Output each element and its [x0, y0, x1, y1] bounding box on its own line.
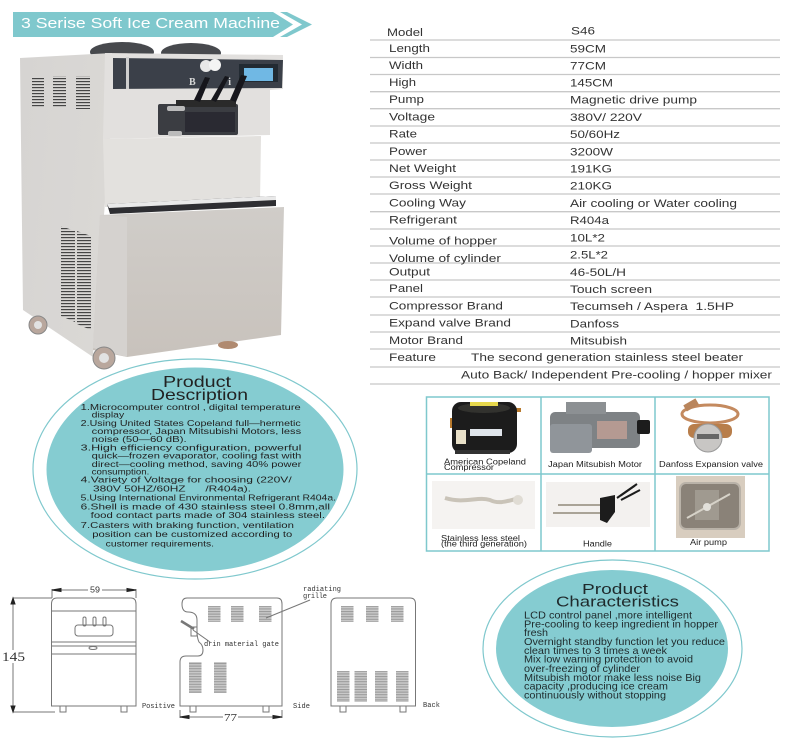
characteristics list: LCD control panel ,more intelligent: [524, 609, 692, 621]
technical drawing: side view: [180, 598, 310, 724]
description list: display: [92, 410, 125, 420]
specification table: 50/60Hz: [570, 129, 620, 141]
label: beater: (the third generation): [441, 540, 527, 548]
heading: product characteristics: Characteristics: [556, 594, 679, 611]
description list: quick—frozen evaporator, cooling fast with: [92, 450, 302, 460]
specification table: High: [389, 77, 416, 89]
characteristics list: [524, 609, 725, 702]
heading: product description: [151, 374, 248, 404]
characteristics list: over-freezing of cylinder: [524, 663, 641, 675]
drawing annotations: Positive: [142, 703, 175, 711]
specification table: 59CM: [570, 44, 606, 56]
label: beater: Stainless less steel: [441, 534, 520, 543]
specification table: Model: [387, 27, 423, 39]
specification table: Voltage: [389, 112, 435, 124]
side vents: [32, 76, 91, 330]
panel: component photo grid: [426, 397, 769, 551]
specification table: Motor Brand: [389, 335, 463, 347]
dimension: depth 77: 77: [224, 713, 237, 724]
characteristics list: Pre-cooling to keep ingredient in hopper: [524, 618, 719, 630]
specification table: 210KG: [570, 180, 612, 192]
specification table: 2.5L*2: [570, 250, 608, 262]
description list: [81, 402, 336, 549]
description list: compressor, Japan Mitsubishi Motors, less: [92, 426, 301, 436]
description list: 5.Using International Environmental Refrigerant R404a.: [81, 493, 336, 503]
panel: product description: [33, 359, 357, 579]
specification table: Refrigerant: [389, 214, 457, 226]
drawing annotations: radiating: [303, 586, 341, 594]
title banner: [13, 12, 312, 37]
drawing annotations: drin material gate: [204, 641, 279, 649]
photo: beater: [432, 481, 535, 529]
technical drawing: back view: [331, 598, 416, 712]
characteristics list: Mix low warning protection to avoid: [524, 654, 693, 666]
specification table: Output: [389, 266, 430, 278]
specification table: Touch screen: [570, 284, 652, 296]
specification table: Volume of hopper: [389, 236, 497, 248]
specification table: Width: [389, 60, 423, 72]
touch screen: [239, 64, 278, 82]
label: handle: Handle: [583, 540, 613, 549]
specification table: 191KG: [570, 164, 612, 176]
description list: 7.Casters with braking function, ventilation: [81, 520, 294, 530]
machine photo: [20, 42, 284, 369]
specification table: Cooling Way: [389, 198, 467, 210]
label: motor: Japan Mitsubish Motor: [548, 460, 642, 469]
drawing annotations: Side: [293, 703, 310, 711]
description list: 2.Using United States Copeland full—hermetic: [81, 418, 302, 428]
specification table: 145CM: [570, 78, 613, 90]
photo: motor: [550, 402, 650, 453]
heading: product description: Description: [151, 387, 248, 404]
drawing annotations: [142, 586, 440, 711]
specification table: Panel: [389, 283, 423, 295]
description list: customer requirements.: [106, 539, 214, 549]
heading: product characteristics: Product: [582, 581, 649, 598]
logo on machine: [189, 59, 231, 88]
title banner: 3 Serise Soft Ice Cream Machine: [21, 15, 280, 32]
specification table: Pump: [389, 94, 424, 106]
panel: product characteristics: [483, 560, 742, 737]
specification table: Volume of cylinder: [389, 253, 501, 265]
drawing annotations: grille: [303, 593, 327, 601]
specification table: S46: [571, 26, 595, 38]
specification table: Feature: [389, 352, 436, 364]
specification table: Expand valve Brand: [389, 318, 511, 330]
specification table: 380V/ 220V: [570, 112, 643, 124]
description list: 4.Variety of Voltage for choosing (220V/: [81, 475, 293, 485]
description list: 6.Shell is made of 430 stainless steel 0.8mm,all: [81, 501, 330, 511]
description list: 1.Microcomputer control , digital temperature: [81, 402, 301, 412]
photo: handle: [546, 482, 650, 527]
dimension: width 59: 59: [90, 586, 101, 594]
description list: direct—cooling method, saving 40% power: [92, 459, 302, 469]
label: air pump: Air pump: [690, 538, 728, 547]
heading: product characteristics: [556, 581, 679, 611]
specification table: [370, 26, 780, 384]
label: compressor: American Copeland: [444, 458, 526, 467]
specification table: Rate: [389, 129, 417, 141]
photo: air pump: [676, 476, 745, 538]
drawing annotations: Back: [423, 702, 440, 710]
specification table: Length: [389, 43, 430, 55]
specification table: Danfoss: [570, 318, 620, 330]
specification table: The second generation stainless steel beater: [471, 352, 743, 364]
casters: [29, 316, 238, 369]
specification table: Auto Back/ Independent Pre-cooling / hopper mixer: [461, 369, 772, 381]
logo on machine: Bi i: [189, 77, 231, 88]
specification table: Magnetic drive pump: [570, 94, 697, 106]
description list: 3.High efficiency configuration, powerful: [81, 442, 302, 452]
label: compressor: [444, 458, 526, 472]
specification table: Power: [389, 146, 427, 158]
description list: food contact parts made of 304 stainless steel.: [91, 510, 325, 520]
description list: position can be customized according to: [92, 529, 293, 539]
photo: compressor: [450, 402, 521, 454]
description list: 380V 50HZ/60HZ /R404a).: [93, 483, 251, 493]
characteristics list: Overnight standby function let you reduce: [524, 636, 725, 648]
dimension: height 145: 145: [2, 649, 25, 664]
label: expansion valve: Danfoss Expansion valve: [659, 460, 764, 469]
specification table: 3200W: [570, 146, 614, 158]
description list: noise (50—60 dB).: [92, 434, 187, 444]
specification table: Mitsubish: [570, 335, 627, 347]
specification table: Net Weight: [389, 163, 456, 175]
technical drawing: positive view: [2, 586, 136, 712]
dispenser: [158, 75, 247, 136]
specification table: 77CM: [570, 61, 606, 73]
specification table: Air cooling or Water cooling: [570, 198, 737, 210]
specification table: R404a: [570, 215, 610, 227]
specification table: Compressor Brand: [389, 301, 503, 313]
specification table: Gross Weight: [389, 180, 472, 192]
heading: product description: Product: [163, 374, 232, 391]
specification table: 46-50L/H: [570, 267, 626, 279]
characteristics list: clean times to 3 times a week: [524, 645, 668, 657]
label: compressor: Compressor: [444, 463, 494, 472]
characteristics list: capacity ,producing ice cream: [524, 681, 668, 693]
photo: expansion valve: [682, 398, 738, 452]
specification table: 10L*2: [570, 233, 605, 245]
specification table: Tecumseh / Aspera 1.5HP: [570, 301, 734, 313]
characteristics list: continuously without stopping: [524, 690, 666, 702]
characteristics list: fresh: [524, 627, 548, 639]
characteristics list: Mitsubish motor make less noise Big: [524, 672, 701, 684]
label: beater: [441, 534, 527, 548]
description list: consumption.: [92, 467, 149, 477]
